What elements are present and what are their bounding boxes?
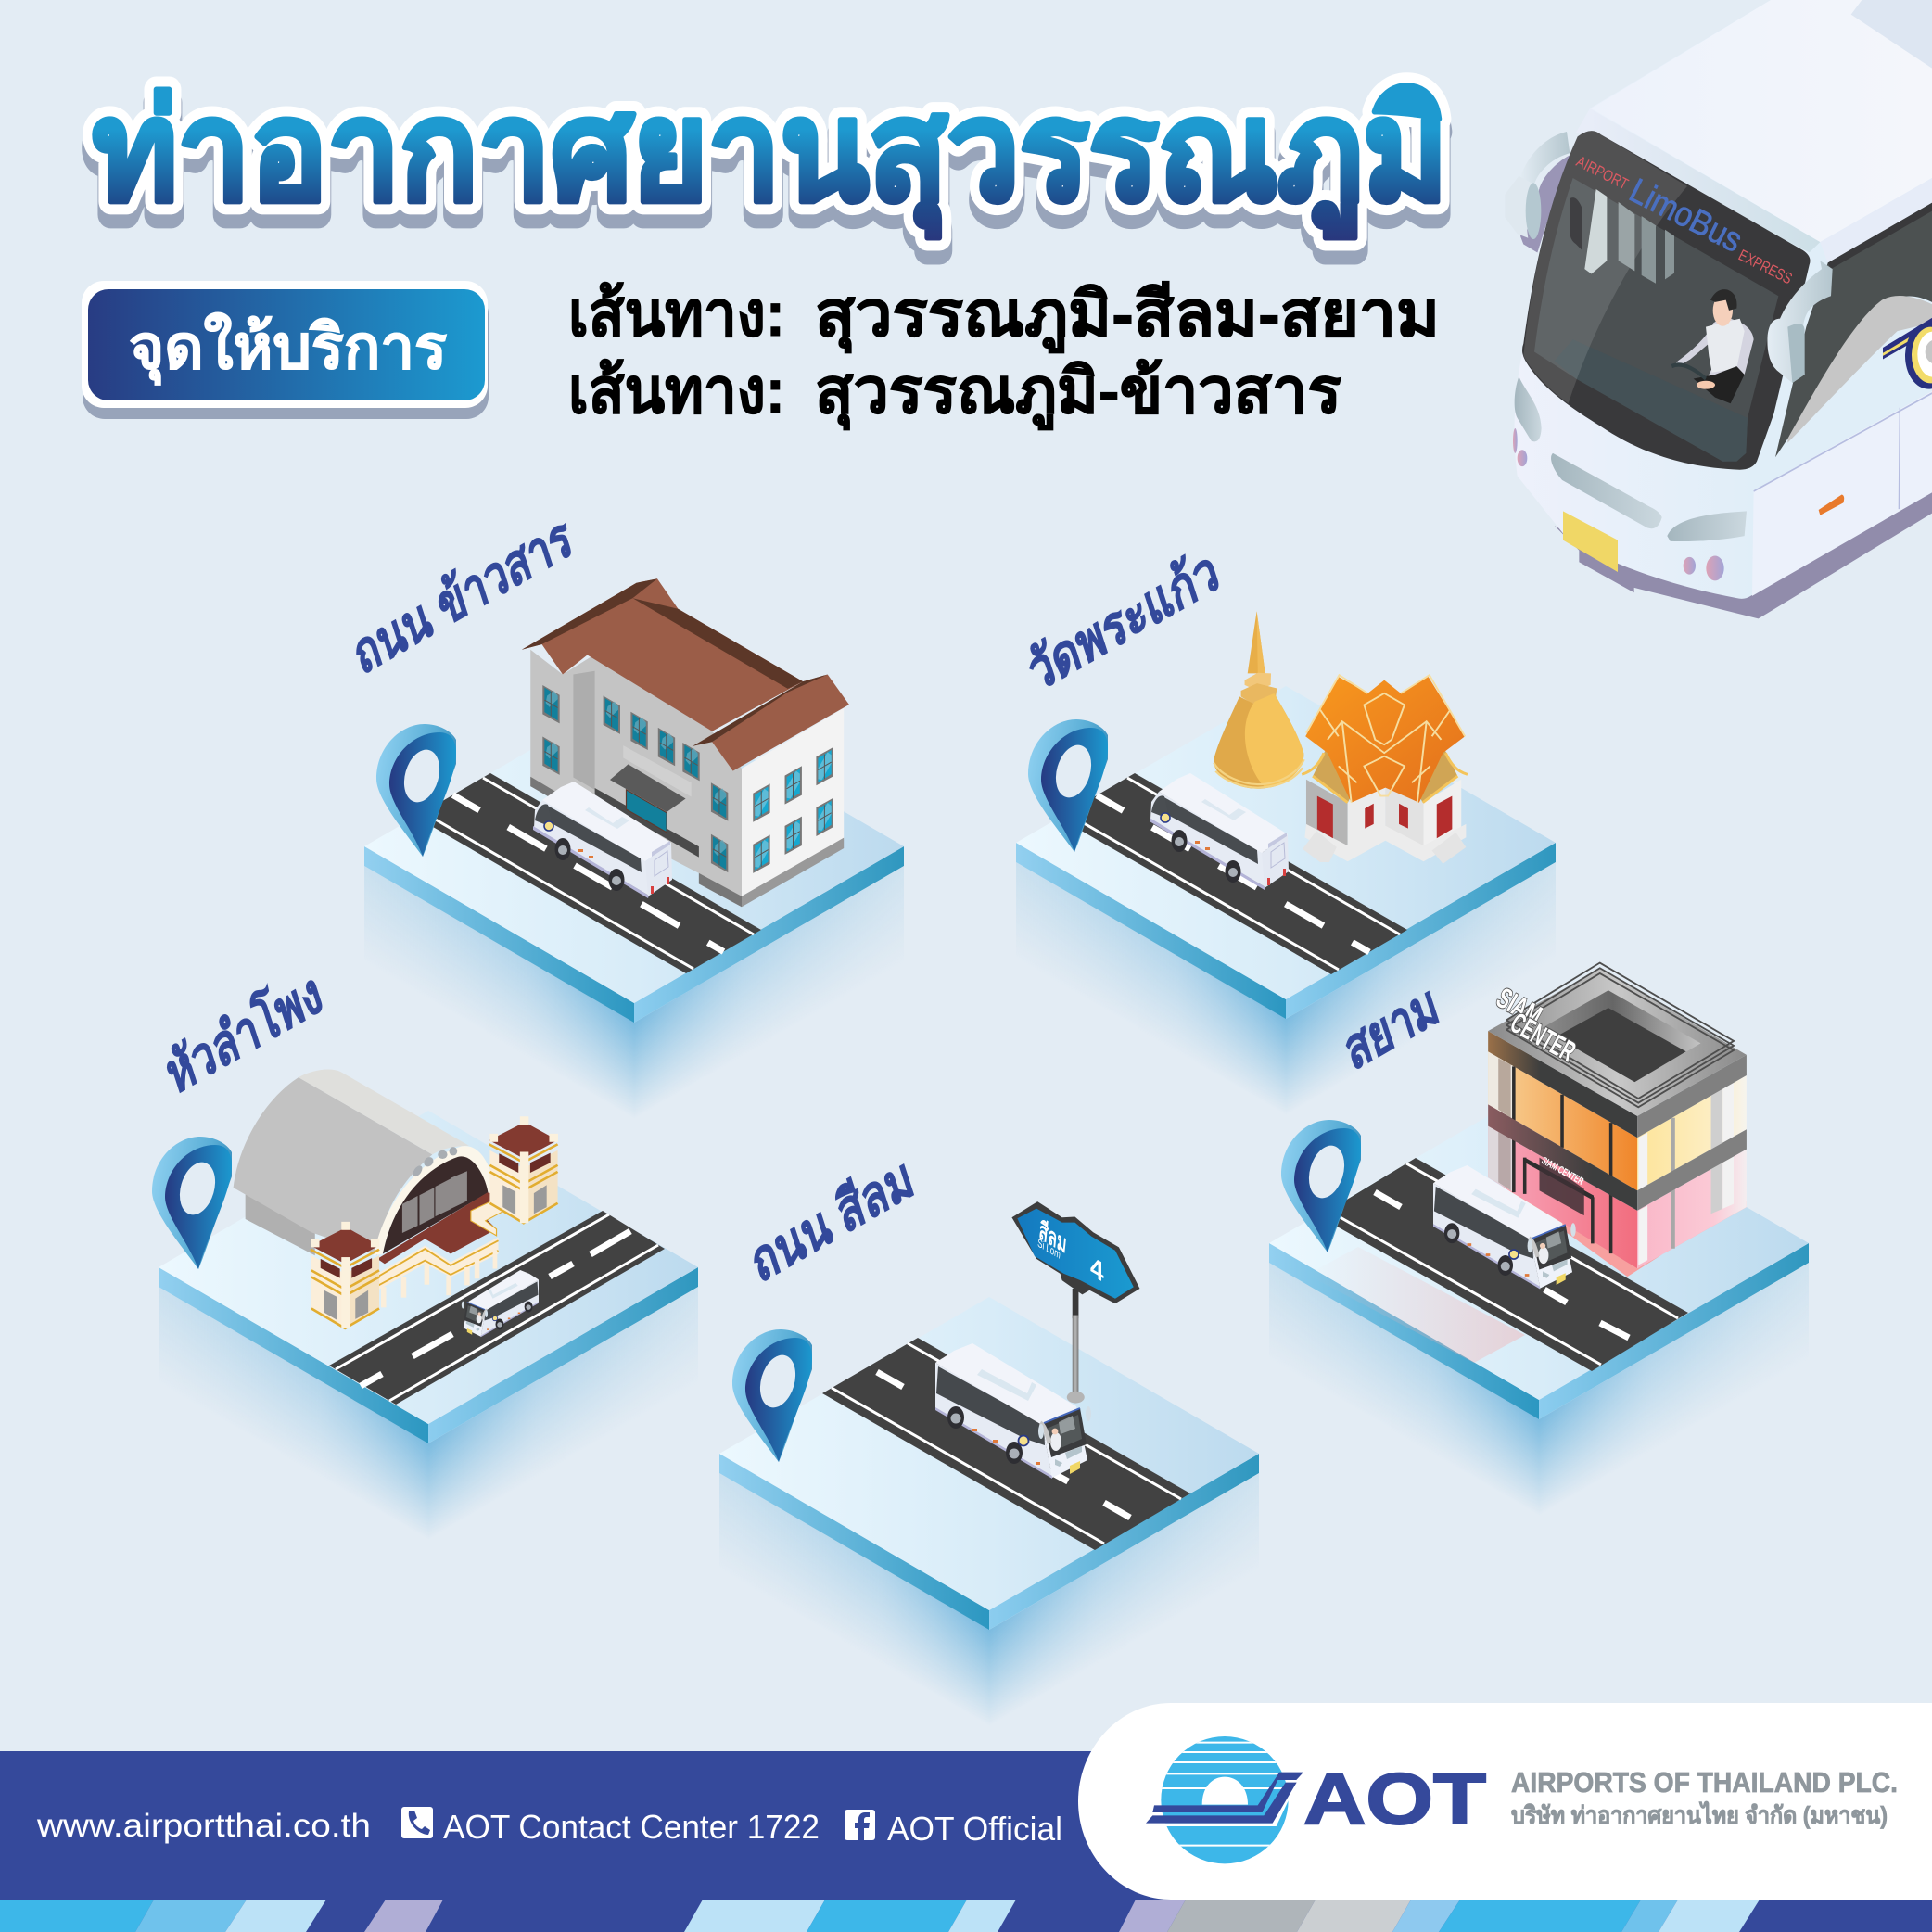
footer band — [0, 1751, 1932, 1932]
building signs: SIAM — [1492, 982, 1547, 1032]
street sign: Si Lom — [1037, 1236, 1061, 1262]
AOT emblem — [1145, 1734, 1303, 1870]
badge: service point — [82, 281, 489, 419]
label: Silom Road: ถนน สีลม — [744, 1146, 921, 1294]
location pin — [732, 1329, 812, 1462]
windshield lettering: AIRPORT — [1573, 153, 1631, 193]
pink floor reflection — [1307, 1247, 1525, 1363]
route text block: เส้นทาง: — [568, 279, 785, 350]
company name — [1511, 1766, 1898, 1829]
location pin — [152, 1137, 232, 1269]
icon: phone — [401, 1807, 433, 1838]
railway station — [234, 1070, 558, 1328]
Siam Center building — [1488, 963, 1747, 1277]
road — [1319, 1158, 1688, 1371]
windshield lettering — [1573, 153, 1795, 287]
bus — [1150, 773, 1289, 890]
label: Wat Phra Kaew: วัดพระแก้ว — [1022, 540, 1226, 704]
label: Hua Lamphong: หัวลำโพง — [159, 959, 329, 1106]
stupa and temple — [1214, 611, 1468, 864]
windshield lettering: EXPRESS — [1735, 247, 1795, 287]
route text block: สุวรรณภูมิ-สีลม-สยาม — [815, 279, 1440, 354]
route text block — [568, 279, 1440, 431]
road — [1059, 773, 1407, 974]
location pin — [1281, 1120, 1361, 1252]
bus — [935, 1343, 1091, 1479]
building — [522, 578, 849, 907]
location pin — [1028, 719, 1108, 852]
panel: Silom Road — [719, 1201, 1259, 1732]
AOT wordmark: AOT — [1303, 1758, 1486, 1839]
website: www.airportthai.co.th — [36, 1808, 371, 1844]
panel: Wat Phra Kaew — [1016, 611, 1556, 1121]
building signs — [1492, 982, 1585, 1188]
road — [415, 773, 761, 973]
icon: facebook — [845, 1810, 875, 1840]
street sign — [1011, 1201, 1139, 1404]
contact center: AOT Contact Center 1722 — [443, 1808, 820, 1846]
badge: service point: จุดให้บริการ — [129, 311, 447, 386]
route text block: สุวรรณภูมิ-ข้าวสาร — [815, 356, 1341, 431]
label: Siam: สยาม — [1338, 973, 1445, 1082]
facebook name: AOT Official — [887, 1810, 1062, 1848]
label: Khao San Road: ถนน ข้าวสาร — [347, 505, 579, 686]
route text block: เส้นทาง: — [568, 356, 785, 426]
road — [822, 1338, 1190, 1550]
windshield lettering: LimoBus — [1623, 172, 1748, 260]
panel: Siam — [1269, 963, 1809, 1521]
title: ท่าอากาศยานสุวรรณภูมิ — [93, 73, 1448, 238]
colour stripes — [0, 1900, 1932, 1932]
bus — [533, 782, 672, 898]
bus — [1433, 1165, 1576, 1290]
title: ท่าอากาศยานสุวรรณภูมิ — [93, 86, 1448, 251]
road — [329, 1211, 665, 1405]
street sign: 4 — [1090, 1251, 1104, 1289]
logo panel — [1078, 1703, 1932, 1900]
street sign: สีลม — [1037, 1215, 1068, 1259]
place labels — [159, 505, 1445, 1294]
panel: Hua Lamphong — [152, 1070, 698, 1545]
location pin — [376, 724, 456, 857]
company name: AIRPORTS OF THAILAND PLC. — [1511, 1766, 1898, 1799]
company name: บริษัท ท่าอากาศยานไทย จำกัด (มหาชน) — [1511, 1800, 1888, 1829]
panel: Khao San Road — [364, 578, 904, 1125]
building signs: SIAM CENTER — [1540, 1155, 1585, 1188]
building signs: CENTER — [1506, 1007, 1581, 1068]
title: ท่าอากาศยานสุวรรณภูมิ — [93, 73, 1448, 238]
large bus illustration — [1505, 0, 1932, 618]
bus — [462, 1270, 539, 1337]
